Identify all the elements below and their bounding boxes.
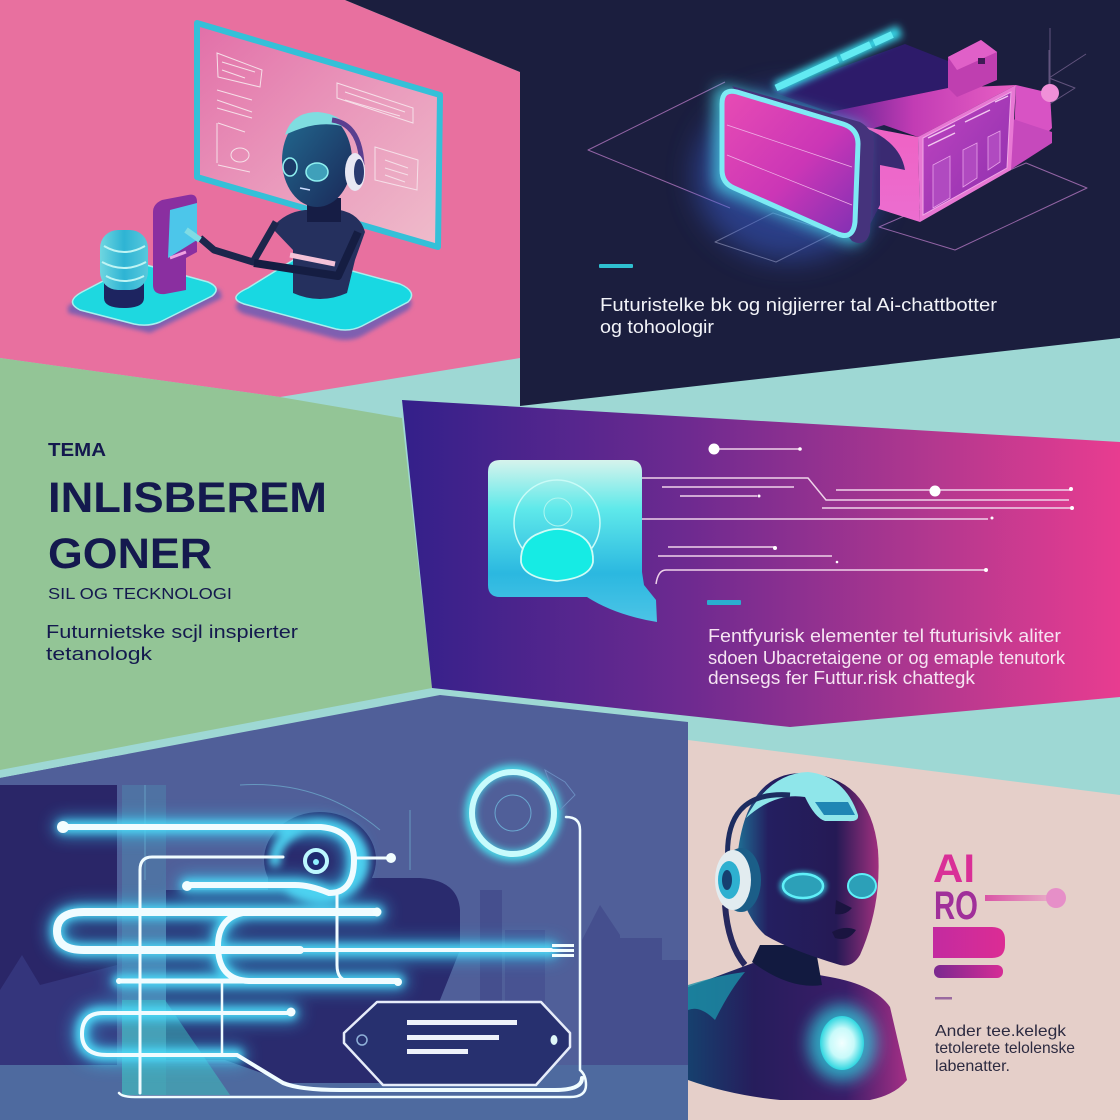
cap window	[815, 802, 855, 815]
caption text	[600, 295, 997, 337]
short dash	[935, 997, 952, 1000]
glow beneath screen	[695, 90, 885, 260]
purple panel text: sdoen Ubacretaigene or og emaple tenutork	[708, 648, 1066, 668]
city silhouette	[0, 890, 688, 1065]
neck	[752, 945, 822, 986]
panel: green title	[0, 358, 432, 770]
title block	[46, 440, 327, 664]
device lower wing	[1010, 118, 1052, 170]
caption text: og tohoologir	[600, 317, 714, 337]
nose and mouth	[832, 900, 856, 939]
info plate	[344, 1002, 570, 1085]
description: Futurnietske scjl inspierter	[46, 622, 298, 642]
floor	[0, 1065, 688, 1120]
logo letters: AI	[933, 847, 975, 891]
logo second row: RO	[934, 884, 978, 928]
logo block	[933, 927, 1005, 958]
dark backdrop	[0, 785, 117, 1065]
illustration: VR headset device	[588, 28, 1087, 337]
headband	[728, 795, 790, 865]
purple panel text: densegs fer Futtur.risk chattegk	[708, 668, 976, 688]
eye node	[305, 850, 327, 872]
chat bubble icon	[488, 460, 657, 622]
circuit nodes	[57, 821, 574, 1016]
ring gauge	[470, 770, 575, 856]
neon wide halo	[57, 827, 551, 1055]
device side wing	[1013, 85, 1052, 168]
device dark gasket	[858, 125, 905, 240]
panel: pink top-left	[0, 0, 520, 397]
translucent column	[122, 785, 410, 1095]
chest light	[808, 1005, 876, 1081]
eyebrow: TEMA	[48, 440, 106, 460]
robot figure	[186, 112, 365, 299]
glowing bar	[776, 31, 900, 88]
left platform	[68, 264, 222, 333]
wireframe floor outlines	[588, 28, 1087, 262]
panel: navy top-right	[345, 0, 1120, 406]
panel: purple chat	[402, 400, 1120, 727]
shoulder highlight	[688, 972, 745, 1020]
circuit illustration	[0, 756, 688, 1120]
portrait caption	[935, 1023, 1075, 1075]
purple panel text: Fentfyurisk elementer tel ftuturisivk aliter	[708, 626, 1061, 646]
subtitle: SIL OG TECKNOLOGI	[48, 586, 232, 603]
left wedge cut	[0, 756, 117, 785]
teal accent dash	[599, 264, 633, 268]
device front panel	[918, 85, 1016, 222]
eyes	[779, 871, 876, 901]
panel: beige portrait	[688, 740, 1120, 1120]
device upper pink face	[830, 85, 1016, 137]
portrait caption: labenatter.	[935, 1058, 1010, 1075]
illustration: robot at holographic screen	[68, 23, 440, 340]
headphone	[715, 848, 761, 912]
headline line one: INLISBEREM	[48, 474, 327, 522]
logo bar	[934, 965, 1003, 978]
head	[737, 773, 879, 966]
fading line and ball	[985, 888, 1066, 908]
connector lines	[642, 444, 1074, 584]
neon core lines	[57, 817, 586, 1097]
water jar	[100, 230, 148, 308]
AI logo	[933, 847, 1066, 978]
panel: blue circuit	[0, 695, 688, 1120]
portrait caption: tetolerete telolenske	[935, 1040, 1075, 1057]
title block: tetanologk	[46, 644, 153, 664]
head cap	[746, 772, 858, 821]
purple panel text	[708, 626, 1066, 688]
portrait caption: Ander tee.kelegk	[935, 1023, 1067, 1040]
device top	[773, 44, 948, 112]
body	[688, 963, 907, 1100]
robot portrait	[688, 772, 907, 1100]
kiosk device	[153, 195, 197, 294]
teal accent dash	[707, 600, 741, 605]
neon glow layer	[57, 825, 551, 1055]
headline line two: GONER	[48, 530, 212, 578]
headset screen	[722, 86, 874, 243]
device left face	[866, 127, 920, 222]
cable	[725, 905, 745, 965]
holographic screen	[197, 23, 440, 247]
pink orb	[1041, 84, 1059, 102]
right platform	[236, 258, 412, 340]
small top box	[948, 40, 997, 97]
caption text: Futuristelke bk og nigjierrer tal Ai-chattbotter	[600, 295, 997, 315]
dark robot silhouette	[166, 812, 460, 1083]
